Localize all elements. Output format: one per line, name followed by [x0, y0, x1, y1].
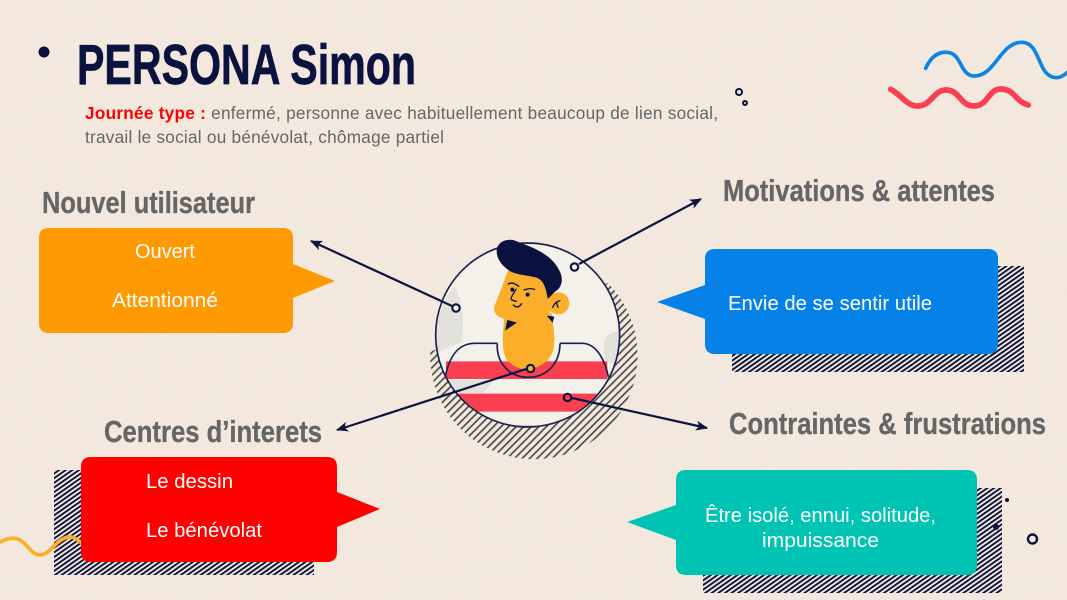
hair	[497, 240, 562, 299]
hatched circle shadow	[430, 283, 638, 459]
heading: nouvel utilisateur: Nouvel utilisateur	[42, 185, 255, 220]
arrow: to contraintes	[572, 398, 707, 428]
squiggle: yellow	[0, 537, 82, 555]
arrow: to nouvel utilisateur	[311, 241, 452, 306]
text: attentionné: Attentionné	[112, 290, 218, 312]
striped shirt	[445, 343, 608, 430]
circle outline	[436, 243, 620, 427]
intro text: travail le social ou bénévolat, chômage partiel	[85, 127, 444, 147]
hatch shadow: teal	[703, 488, 1002, 593]
icon: small rings top	[736, 89, 747, 105]
text: le bénévolat: Le bénévolat	[146, 520, 262, 542]
arrow: to motivations	[579, 199, 701, 264]
text: impuissance: impuissance	[762, 530, 879, 552]
speech bubble: teal	[627, 470, 977, 575]
panel: contraintes et frustrations	[627, 406, 1046, 593]
icon: dots bottom right	[993, 498, 1037, 544]
red squiggle	[891, 89, 1028, 106]
face	[494, 270, 555, 320]
neck	[503, 300, 554, 369]
text: ouvert: Ouvert	[135, 241, 195, 263]
text: le dessin: Le dessin	[146, 471, 233, 493]
text: être isolé: Être isolé, ennui, solitude,	[705, 504, 936, 527]
persona illustration	[430, 240, 638, 459]
panel: centres d'interets	[0, 414, 380, 575]
heading: motivations: Motivations & attentes	[723, 173, 995, 208]
blue squiggle	[926, 42, 1067, 78]
panel: motivations et attentes	[657, 173, 1024, 372]
neck shadow	[505, 320, 517, 331]
panel: nouvel utilisateur	[39, 185, 335, 333]
hatch shadow: red	[54, 470, 314, 575]
text: envie: Envie de se sentir utile	[728, 293, 932, 315]
portrait circle	[436, 243, 620, 427]
hatch shadow: blue	[732, 266, 1024, 372]
decorative dot near title	[38, 46, 50, 58]
intro text	[85, 103, 718, 147]
connector dots	[452, 263, 578, 401]
ear	[547, 292, 569, 314]
intro text: Journée type : enfermé, personne avec habituellement beaucoup de lien social,	[85, 103, 718, 123]
speech bubble: orange	[39, 228, 335, 333]
speech bubble: blue	[657, 249, 998, 354]
speech bubble: red	[81, 457, 380, 562]
title: PERSONA Simon	[77, 33, 416, 97]
heading: centres: Centres d’interets	[104, 414, 322, 449]
arrow: to centres	[337, 369, 526, 430]
facial features	[508, 283, 560, 307]
shading patches	[433, 287, 620, 393]
